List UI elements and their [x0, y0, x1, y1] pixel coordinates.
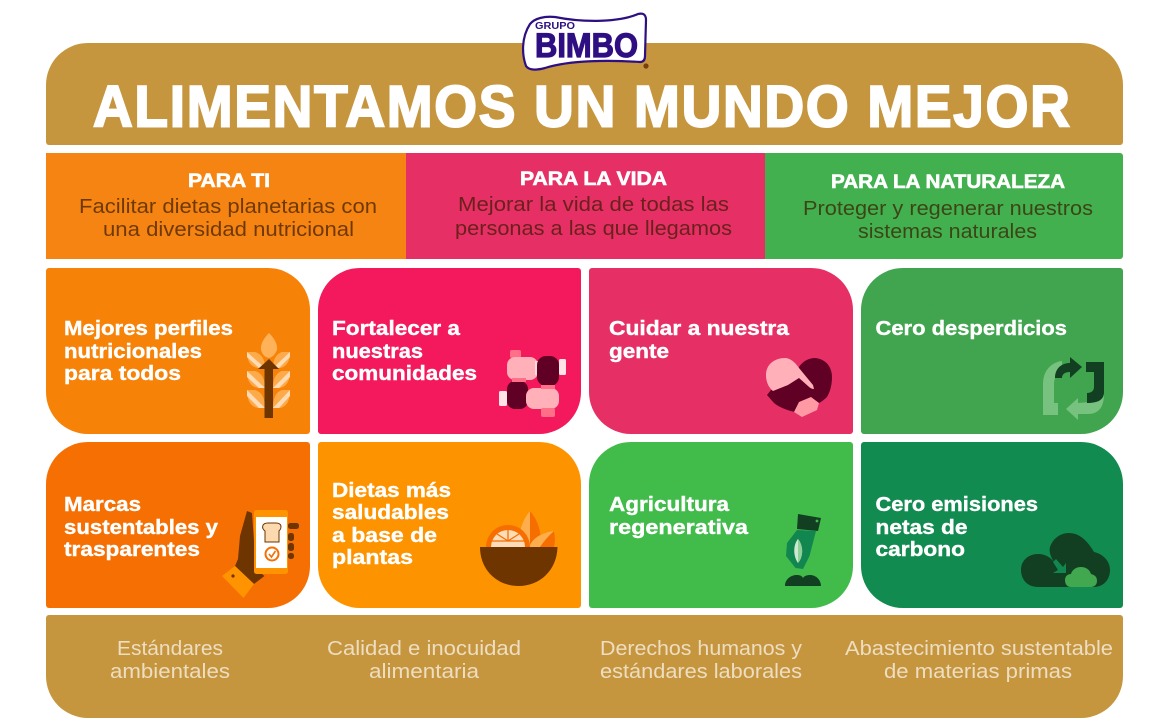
- card: marcas sustentables y trasparentes: sustentables y: [64, 516, 219, 539]
- panel: para la naturaleza: [765, 153, 1123, 259]
- text: estándares ambientales: Estándares: [117, 638, 223, 660]
- card: marcas sustentables y trasparentes: [46, 442, 310, 608]
- text: derechos humanos y estándares laborales: estándares laborales: [600, 661, 802, 683]
- card: cuidar a nuestra gente: gente: [609, 340, 669, 363]
- card: mejores perfiles nutricionales: para todos: [64, 362, 181, 385]
- card: dietas más saludables: plantas: [332, 546, 413, 569]
- title: ALIMENTAMOS UN MUNDO MEJOR: [93, 74, 1070, 139]
- card: cero emisiones netas de carbono: netas de: [876, 516, 968, 539]
- card: fortalecer a nuestras comunidades: nuestras: [332, 340, 423, 363]
- logo: Grupo Bimbo: [523, 14, 649, 70]
- card: dietas más saludables: Dietas más: [332, 479, 451, 502]
- card: cuidar a nuestra gente: Cuidar a nuestra: [609, 317, 790, 340]
- text: abastecimiento sustentable de materias primas: de materias primas: [884, 661, 1072, 683]
- icon: hand holding phone: [222, 510, 299, 598]
- text: calidad e inocuidad alimentaria: Calidad e inocuidad: [327, 638, 521, 660]
- panel: para ti: una diversidad nutricional: [103, 219, 354, 241]
- logo: Grupo Bimbo: BIMBO: [535, 27, 638, 65]
- card: mejores perfiles nutricionales: nutricionales: [64, 340, 202, 363]
- text: abastecimiento sustentable de materias primas: Abastecimiento sustentable: [845, 638, 1113, 660]
- card: cero desperdicios: Cero desperdicios: [876, 317, 1067, 340]
- text: derechos humanos y estándares laborales: [600, 638, 802, 683]
- panel: para la naturaleza: sistemas naturales: [858, 221, 1037, 243]
- icon: joined hands: [499, 350, 566, 417]
- card: fortalecer a nuestras comunidades: comunidades: [332, 362, 477, 385]
- card: agricultura regenerativa: Agricultura: [609, 493, 730, 516]
- card: cero emisiones netas de carbono: Cero emisiones: [876, 493, 1038, 516]
- card: dietas más saludables: [318, 442, 581, 608]
- panel: para ti: PARA TI: [188, 171, 270, 192]
- panel: para la vida: [406, 153, 765, 259]
- icon: handshake heart: [766, 358, 832, 417]
- panel: para la vida: personas a las que llegamos: [455, 218, 732, 240]
- card: dietas más saludables: a base de: [332, 524, 437, 547]
- text: estándares ambientales: [110, 638, 230, 683]
- panel: para ti: [46, 153, 406, 259]
- card: cero emisiones netas de carbono: carbono: [876, 538, 965, 561]
- logo: Grupo Bimbo: GRUPO: [535, 21, 575, 32]
- card: agricultura regenerativa: regenerativa: [609, 516, 749, 539]
- card: agricultura regenerativa: [589, 442, 853, 608]
- card: marcas sustentables y trasparentes: trasparentes: [64, 538, 200, 561]
- text: calidad e inocuidad alimentaria: alimentaria: [369, 661, 480, 683]
- card: fortalecer a nuestras comunidades: [318, 268, 581, 434]
- card: dietas más saludables: saludables: [332, 501, 449, 524]
- panel: para la naturaleza: Proteger y regenerar nuestros: [803, 198, 1093, 220]
- text: derechos humanos y estándares laborales: Derechos humanos y: [600, 638, 802, 660]
- icon: hand with sprout: [785, 514, 821, 586]
- panel: para la naturaleza: PARA LA NATURALEZA: [831, 172, 1065, 193]
- panel: para la vida: PARA LA VIDA: [520, 169, 667, 190]
- panel: para ti: Facilitar dietas planetarias con: [79, 196, 377, 218]
- text: abastecimiento sustentable de materias primas: [845, 638, 1113, 683]
- header band: [46, 43, 1123, 145]
- icon: recycle arrows: [1043, 357, 1104, 420]
- card: mejores perfiles nutricionales: Mejores perfiles: [64, 317, 233, 340]
- footer band: [46, 615, 1123, 718]
- icon: carbon cloud: [1021, 533, 1110, 587]
- card: cero emisiones netas de carbono: [861, 442, 1123, 608]
- panel: para la vida: Mejorar la vida de todas las: [458, 194, 729, 216]
- card: fortalecer a nuestras comunidades: Fortalecer a: [332, 317, 461, 340]
- card: cero desperdicios: [861, 268, 1123, 434]
- icon: bowl of fruit: [480, 511, 558, 586]
- card: marcas sustentables y trasparentes: Marcas: [64, 493, 141, 516]
- icon: wheat with arrow: [247, 333, 290, 418]
- card: cuidar a nuestra gente: [589, 268, 853, 434]
- text: estándares ambientales: ambientales: [110, 661, 230, 683]
- card: mejores perfiles nutricionales: [46, 268, 310, 434]
- text: calidad e inocuidad alimentaria: [327, 638, 521, 683]
